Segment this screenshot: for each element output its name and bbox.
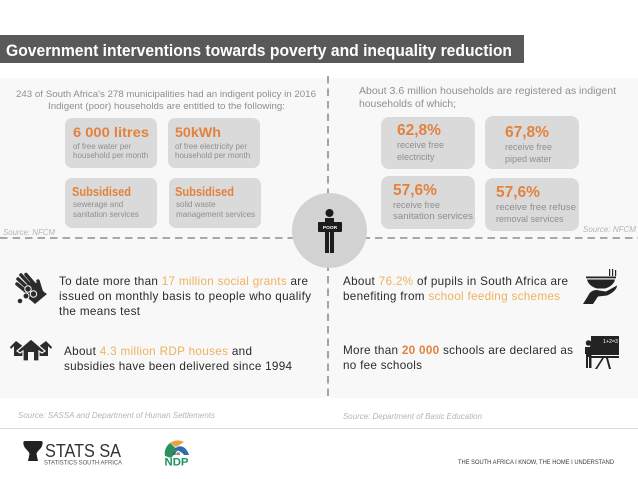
intro text [16, 89, 316, 112]
text: social grants: To date more than 17 million social grants are [59, 275, 308, 288]
icon: bowl in hand [583, 269, 617, 304]
tagline: THE SOUTH AFRICA I KNOW, THE HOME I UNDERSTAND [458, 459, 614, 466]
card: sanitation: sanitation services [73, 210, 139, 219]
title bar: Government interventions towards poverty and inequality reduction [6, 42, 512, 60]
source: Source: NFCM [3, 227, 56, 237]
text: no fee schools: More than 20 000 schools are declared as [343, 344, 573, 357]
card: sanitation: sewerage and [73, 200, 123, 209]
logo: NDP: 2030 [173, 452, 180, 456]
source: Source: NFCM [583, 224, 637, 234]
intro text: Indigent (poor) households are entitled to the following: [48, 101, 285, 112]
logo: NDP: NDP [164, 456, 188, 468]
card: water: household per month [73, 151, 148, 160]
icon: person holding poor sign [292, 193, 367, 268]
card: refuse: 57,6% [496, 184, 540, 201]
icon: hand with coins [17, 274, 47, 304]
title bar [0, 35, 524, 63]
card: sanitation [381, 176, 475, 229]
card: water [65, 118, 157, 168]
intro text: About 3.6 million households are registered as indigent [359, 86, 616, 97]
card: sanitation: sanitation services [393, 211, 474, 221]
card: sanitation: Subsidised [72, 185, 131, 199]
icon: houses [10, 339, 52, 361]
card: electricity: electricity [397, 152, 435, 162]
panel: indigent policy entitlements [3, 89, 316, 237]
text: school feeding: benefiting from school feeding schemes [343, 290, 560, 303]
text: RDP houses [64, 345, 292, 373]
card: water: of free water per [73, 142, 132, 151]
intro text: 243 of South Africa's 278 municipalities had an indigent policy in 2016 [16, 89, 316, 100]
logo: Stats SA: STATISTICS SOUTH AFRICA [44, 460, 123, 466]
source: Basic Education: Source: Department of Basic Education [343, 411, 482, 421]
card: electricity: receive free [397, 140, 444, 150]
card: electricity: household per month [175, 151, 250, 160]
text: RDP houses: subsidies have been delivered since 1994 [64, 360, 292, 373]
intro text: households of which; [359, 99, 456, 110]
text: school feeding: About 76.2% of pupils in South Africa are [343, 275, 568, 288]
card: piped water: receive free [505, 142, 552, 152]
text: social grants [59, 275, 311, 318]
card: refuse: removal services [496, 214, 564, 224]
card: sanitation [65, 178, 157, 228]
text: RDP houses: About 4.3 million RDP houses and [64, 345, 252, 358]
source: SASSA: Source: SASSA and Department of Human Settlements [18, 410, 216, 420]
logo: Stats SA: STATS SA [45, 440, 122, 461]
card: waste [169, 178, 261, 228]
card: waste: solid waste [176, 200, 216, 209]
card: electricity [168, 118, 260, 168]
text: social grants: the means test [59, 305, 141, 318]
card: electricity: of free electricity per [175, 142, 247, 151]
card: refuse: receive free refuse [496, 202, 576, 212]
text: social grants: issued on monthly basis to people who qualify [59, 290, 311, 303]
card: electricity [381, 117, 475, 169]
card: waste: Subsidised [175, 185, 234, 199]
card: piped water: 67,8% [505, 124, 549, 141]
card: water: 6 000 litres [73, 124, 149, 140]
card: piped water: piped water [505, 154, 552, 164]
card: sanitation: 57,6% [393, 182, 437, 199]
card: waste: management services [176, 210, 255, 219]
text: no fee schools: no fee schools [343, 359, 422, 372]
card: refuse [485, 178, 579, 231]
text: school feeding [343, 275, 568, 303]
card: sanitation: receive free [393, 200, 440, 210]
card: electricity: 50kWh [175, 124, 221, 140]
icon: teacher at blackboard [585, 336, 619, 369]
intro text [359, 86, 616, 110]
text: no fee schools [343, 344, 573, 372]
panel: registered households [359, 86, 637, 234]
background panel [0, 78, 638, 398]
logo: Stats SA [23, 440, 123, 466]
icon: teacher at blackboard: 1+2=3 [603, 339, 618, 345]
logo: NDP [164, 440, 189, 468]
card: electricity: 62,8% [397, 122, 441, 139]
card: piped water [485, 116, 579, 169]
icon: person holding poor sign: POOR [323, 225, 338, 231]
